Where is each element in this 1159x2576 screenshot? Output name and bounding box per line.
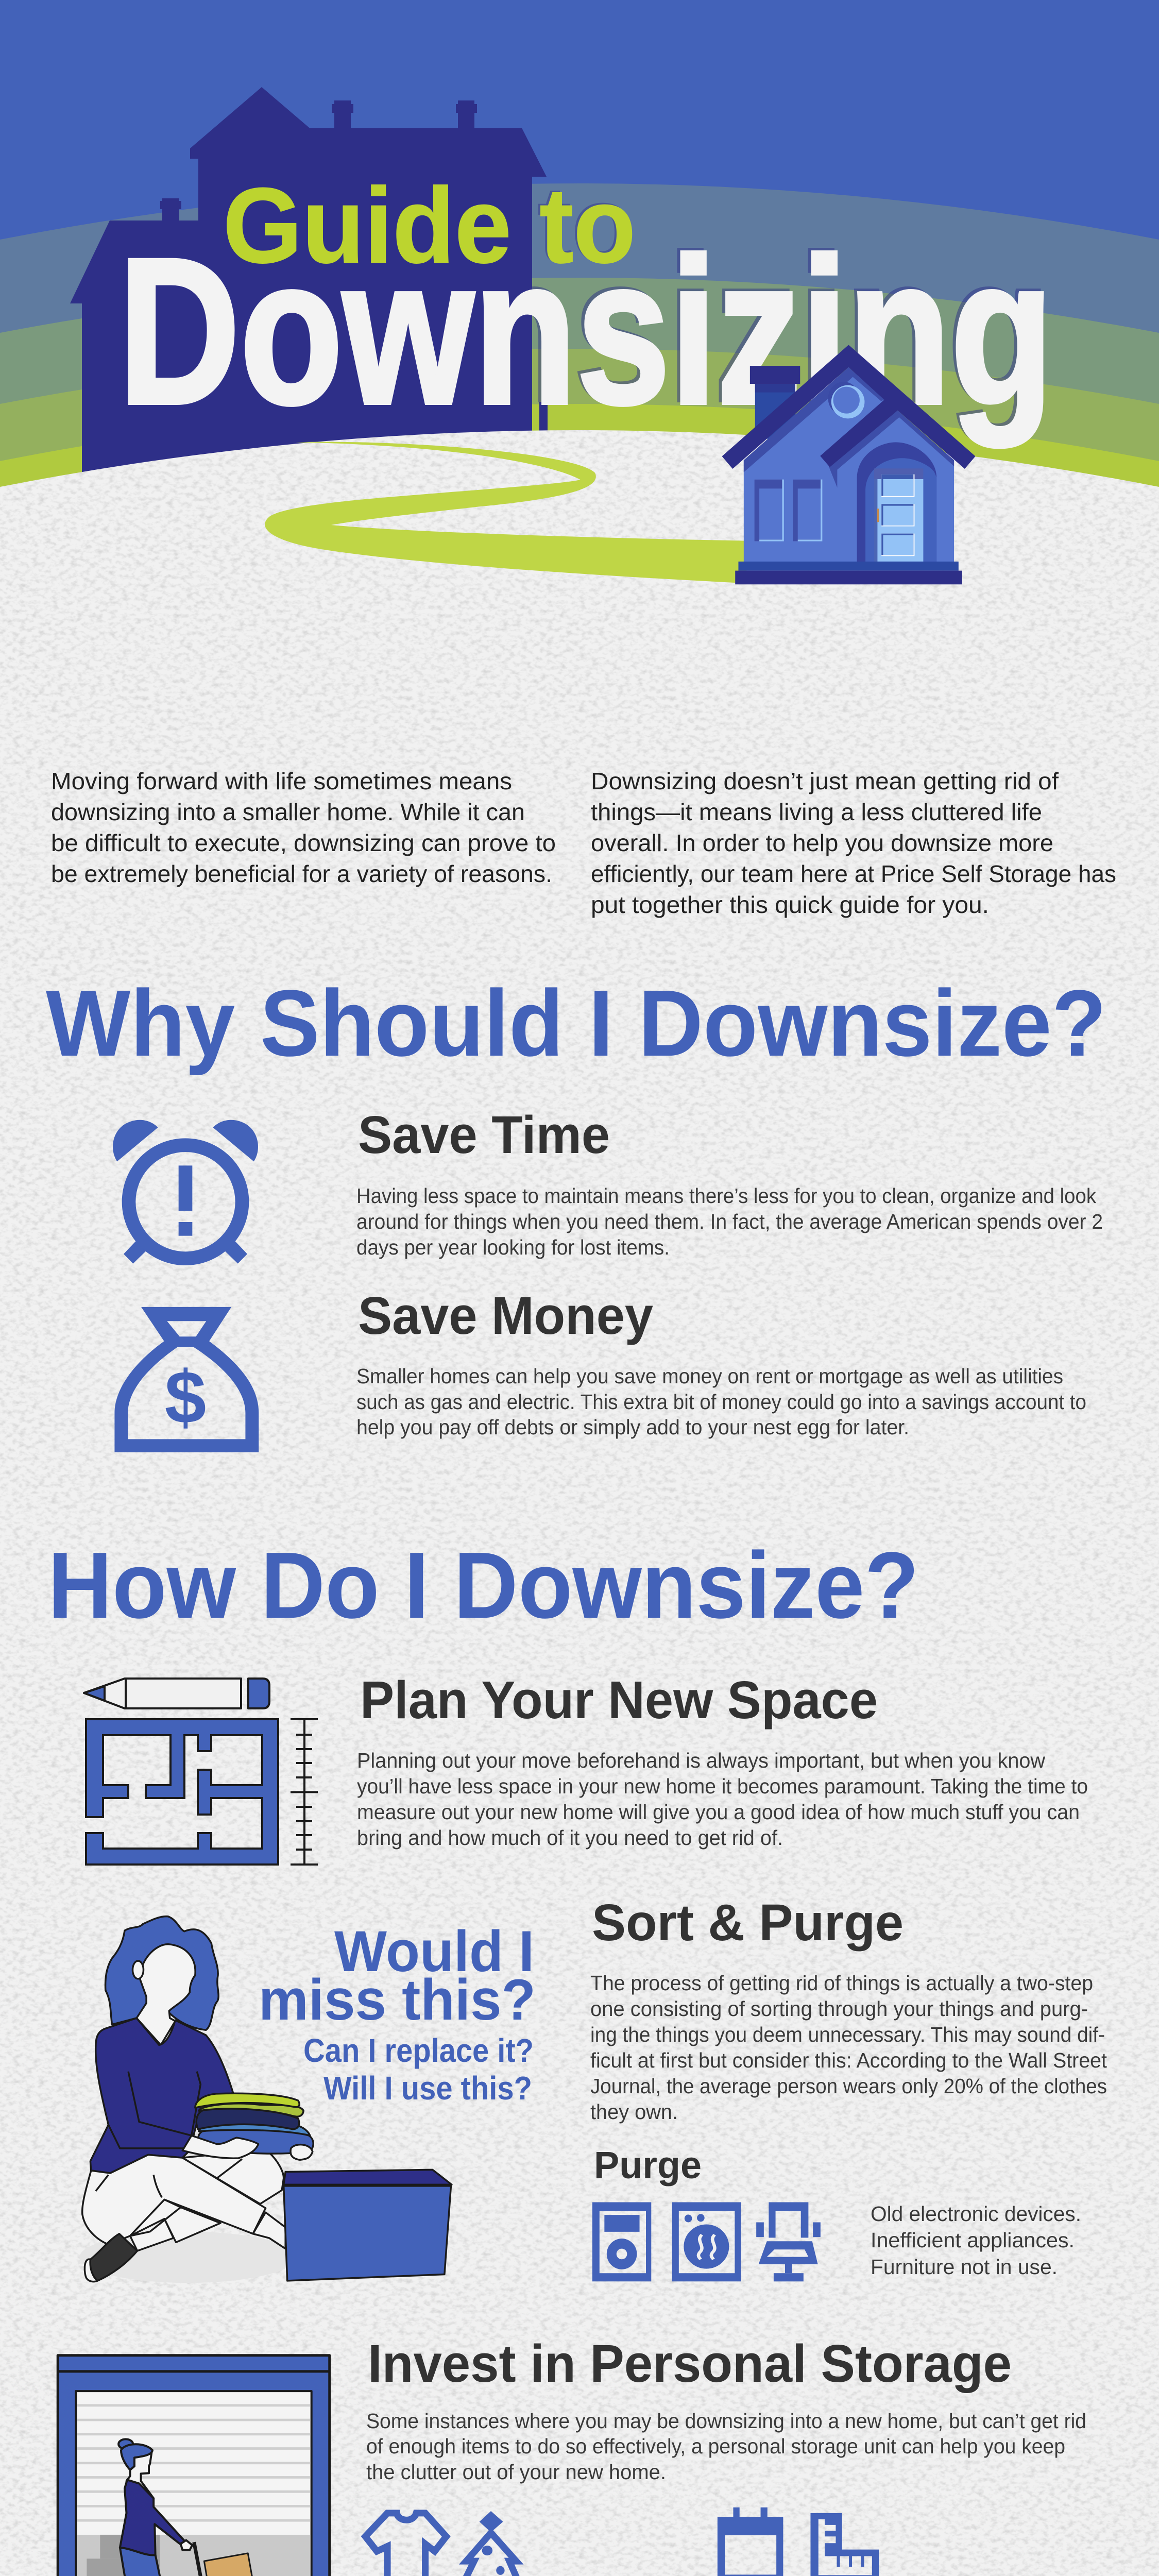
text: purge list xyxy=(871,2202,1081,2279)
icon: t-shirt xyxy=(365,2513,446,2576)
icon: small blue house xyxy=(722,345,976,584)
text: purge list: Furniture not in use. xyxy=(871,2255,1058,2279)
text: sort and purge xyxy=(590,1971,1107,2124)
intro text: right column: Downsizing doesn’t just mean getting rid of xyxy=(591,768,1059,794)
text: purge list: Inefficient appliances. xyxy=(871,2228,1075,2252)
heading: how do I downsize: How Do I Downsize? xyxy=(48,1532,919,1638)
callout: would I miss this: Can I replace it? xyxy=(303,2032,534,2069)
callout: would I miss this xyxy=(259,1919,536,2107)
text: plan your new space: measure out your new home will give you a good idea of how much stuff you can xyxy=(357,1800,1080,1824)
intro text: right column: efficiently, our team here at Price Self Storage has xyxy=(591,860,1116,887)
text: plan your new space xyxy=(357,1749,1088,1850)
intro text: right column xyxy=(591,768,1116,918)
text: plan your new space: bring and how much of it you need to get rid of. xyxy=(357,1826,783,1850)
text: sort and purge: they own. xyxy=(590,2100,678,2124)
text: invest in personal storage xyxy=(366,2409,1086,2484)
icon: money bag xyxy=(114,1307,259,1452)
icon: pencil xyxy=(84,1679,269,1708)
text: invest in personal storage: the clutter out of your new home. xyxy=(366,2460,666,2484)
title: Guide to xyxy=(223,166,636,285)
winding road xyxy=(265,442,746,583)
text: save time: around for things when you need them. In fact, the average American spends over 2 xyxy=(356,1210,1103,1233)
icon: money bag: $ xyxy=(165,1355,206,1439)
text: save money: such as gas and electric. This extra bit of money could go into a savings account to xyxy=(356,1390,1086,1414)
text: plan your new space: you’ll have less space in your new home it becomes paramount. Taking the time to xyxy=(357,1774,1088,1798)
icon: ruler scale xyxy=(291,1719,318,1865)
text: purge list: Old electronic devices. xyxy=(871,2202,1081,2226)
text: sort and purge: ing the things you deem unnecessary. This may sound dif- xyxy=(590,2023,1105,2046)
text: save money xyxy=(356,1364,1086,1439)
illustration: woman sorting clothes xyxy=(79,1917,452,2283)
text: plan your new space: Planning out your move beforehand is always important, but when you know xyxy=(357,1749,1045,1772)
icon: christmas tree xyxy=(464,2511,519,2576)
icon: set square ruler xyxy=(810,2513,879,2576)
text: sort and purge: ficult at first but consider this: According to the Wall Street xyxy=(590,2048,1107,2072)
icon: washing machine xyxy=(672,2202,741,2281)
callout: would I miss this: Would I xyxy=(334,1919,534,1984)
sky background xyxy=(0,0,1159,515)
icon: chair xyxy=(756,2202,821,2281)
heading: save time: Save Time xyxy=(358,1105,610,1164)
text: save money: Smaller homes can help you save money on rent or mortgage as well as utilities xyxy=(356,1364,1063,1388)
text: invest in personal storage: of enough items to do so effectively, a personal storage unit can help you keep xyxy=(366,2434,1065,2458)
text: save time: days per year looking for lost items. xyxy=(356,1235,670,1259)
intro text: right column: put together this quick guide for you. xyxy=(591,891,989,918)
heading: purge: Purge xyxy=(594,2144,702,2187)
heading: invest in personal storage: Invest in Personal Storage xyxy=(368,2334,1012,2393)
icon: speaker xyxy=(592,2202,651,2281)
icon: calendar xyxy=(718,2507,783,2576)
text: invest in personal storage: Some instances where you may be downsizing into a new home, but can’t get rid xyxy=(366,2409,1086,2433)
icon: floor plan xyxy=(86,1719,278,1865)
intro text: left column xyxy=(51,768,556,887)
intro text: right column: overall. In order to help you downsize more xyxy=(591,829,1053,856)
text: sort and purge: one consisting of sorting through your things and purg- xyxy=(590,1997,1088,2021)
callout: would I miss this: miss this? xyxy=(259,1968,536,2032)
rolling hills xyxy=(0,183,1159,515)
intro text: left column: Moving forward with life sometimes means xyxy=(51,768,512,794)
intro text: right column: things—it means living a less cluttered life xyxy=(591,799,1042,825)
text: save time xyxy=(356,1184,1103,1259)
heading: sort and purge: Sort & Purge xyxy=(592,1894,904,1952)
heading: why should I downsize: Why Should I Downsize? xyxy=(46,970,1106,1076)
text: sort and purge: Journal, the average person wears only 20% of the clothes xyxy=(590,2074,1107,2098)
big house silhouette xyxy=(70,87,548,474)
heading: plan your new space: Plan Your New Space xyxy=(360,1670,878,1730)
heading: save money: Save Money xyxy=(358,1286,653,1345)
icon: alarm clock xyxy=(113,1120,258,1264)
intro text: left column: downsizing into a smaller home. While it can xyxy=(51,799,525,825)
intro text: left column: be extremely beneficial for a variety of reasons. xyxy=(51,860,552,887)
intro text: left column: be difficult to execute, downsizing can prove to xyxy=(51,829,556,856)
callout: would I miss this: Will I use this? xyxy=(323,2070,532,2107)
text: save time: Having less space to maintain means there’s less for you to clean, organize and look xyxy=(356,1184,1096,1208)
text: sort and purge: The process of getting rid of things is actually a two-step xyxy=(590,1971,1093,1995)
illustration: storage unit and woman with hand truck xyxy=(58,2355,330,2576)
text: save money: help you pay off debts or simply add to your nest egg for later. xyxy=(356,1415,909,1439)
